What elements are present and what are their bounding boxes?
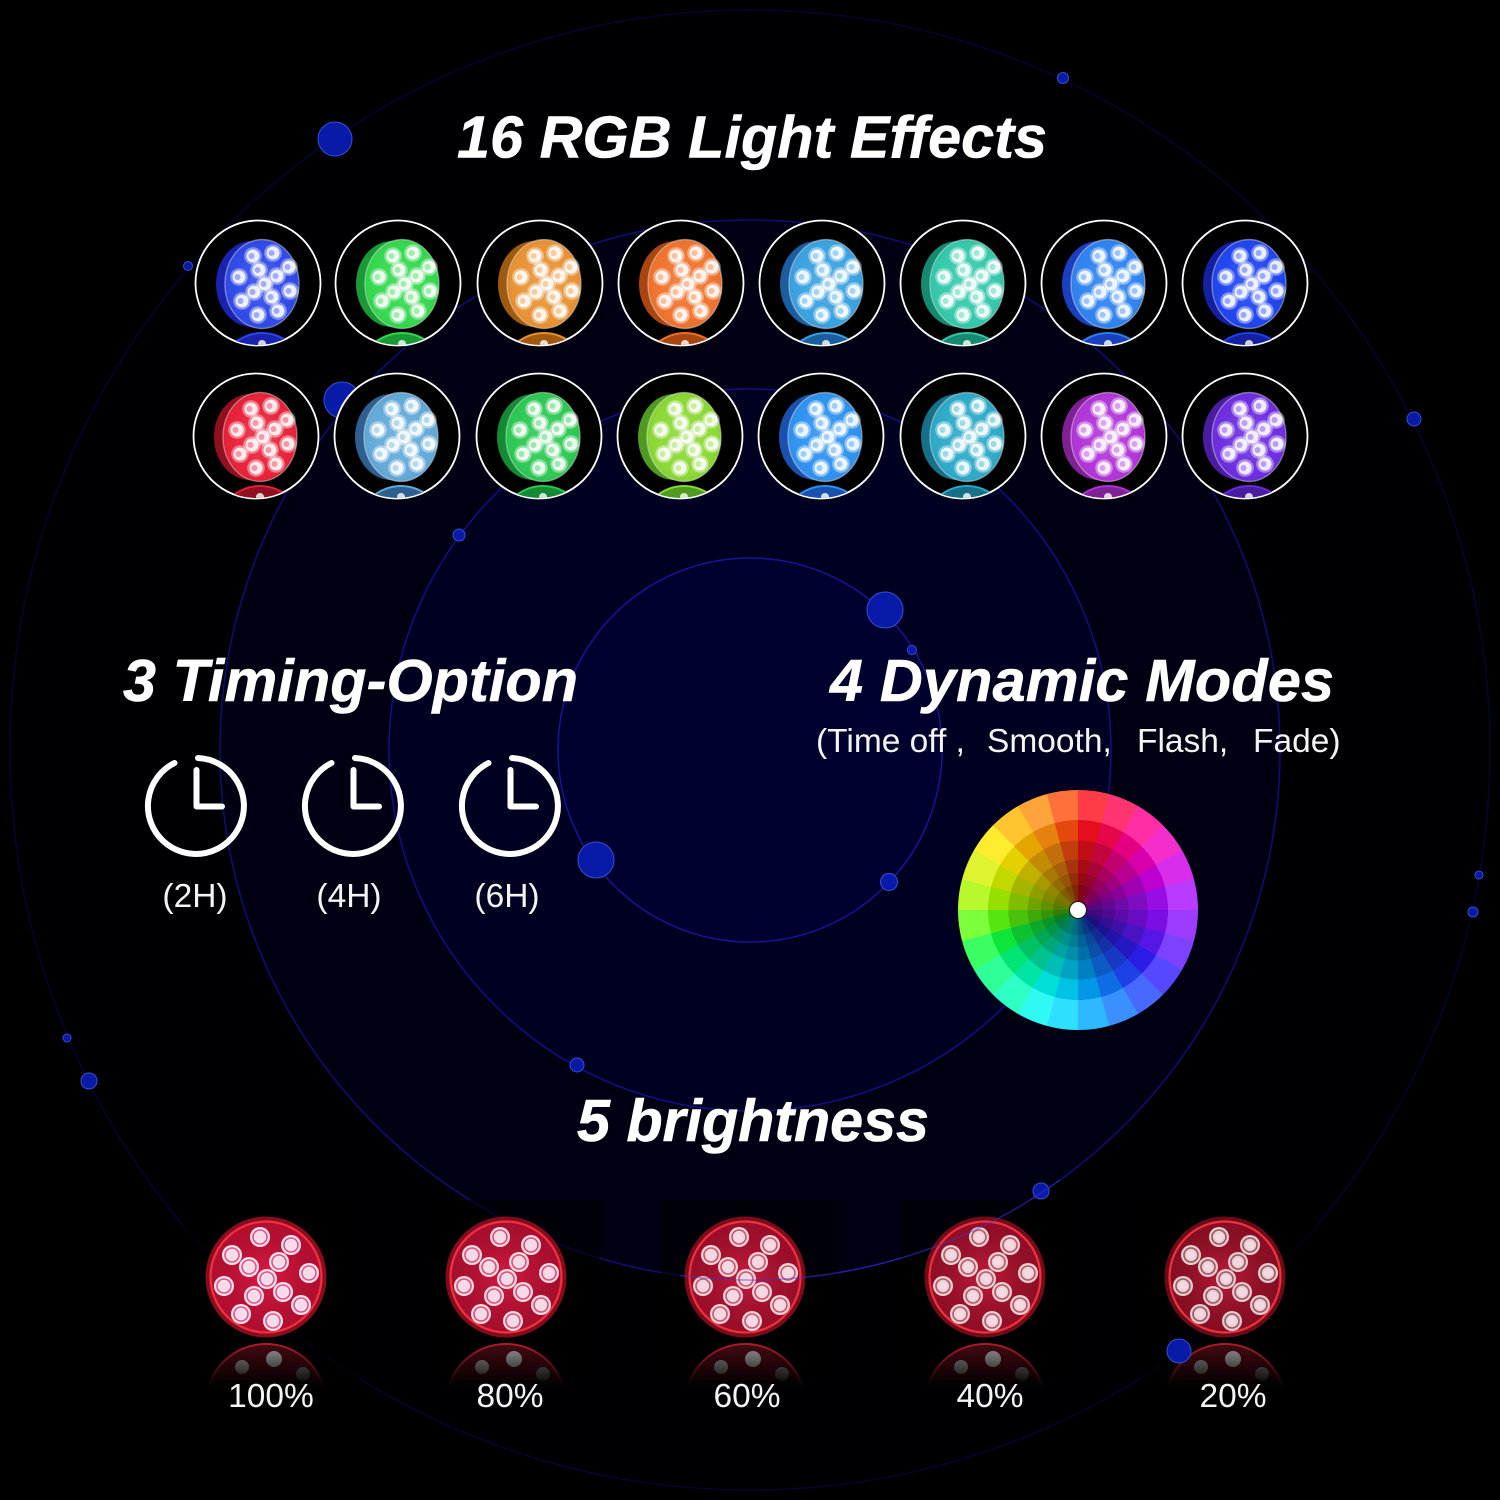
lamp row 1 [196,220,1308,419]
label: 4H: (4H) [316,878,382,915]
icon: clock 4H [305,758,401,854]
label: 20%: 20% [1199,1378,1267,1415]
lamp 80% [422,1200,600,1464]
label: 6H: (6H) [474,878,540,915]
lamp 100% [182,1200,360,1464]
heading: 3 Timing-Option: 3 Timing-Option [123,647,578,714]
icon: clock 6H [462,758,558,854]
color wheel [958,790,1198,1030]
lamp row 2 [194,374,1308,572]
heading: 5 brightness: 5 brightness [577,1087,929,1154]
orbit line over lamps [680,1180,1060,1280]
orbit dot over lamp [1167,1339,1191,1363]
panel: brightness lamps [182,1180,1319,1464]
orbit dots [63,72,1483,1199]
text: dynamic mode names: Flash, [1137,723,1228,760]
label: 2H: (2H) [162,878,228,915]
text: dynamic mode names: Smooth, [987,723,1112,760]
label: 100%: 100% [228,1378,314,1415]
text: dynamic mode names: (Time off , [816,723,965,760]
text: dynamic mode names: Fade) [1253,723,1341,760]
panel: 16 light effect lamps [194,220,1308,572]
title: 16 RGB Light Effects: 16 RGB Light Effects [457,104,1047,170]
icon: clock 2H [148,758,244,854]
label: 80%: 80% [476,1378,544,1415]
label: 40%: 40% [956,1378,1024,1415]
heading: 4 Dynamic Modes: 4 Dynamic Modes [829,647,1334,714]
label: 60%: 60% [713,1378,781,1415]
panel: timer clocks [148,758,558,915]
lamp 20% [1141,1200,1319,1464]
lamp 40% [901,1200,1079,1464]
lamp 60% [661,1200,839,1464]
